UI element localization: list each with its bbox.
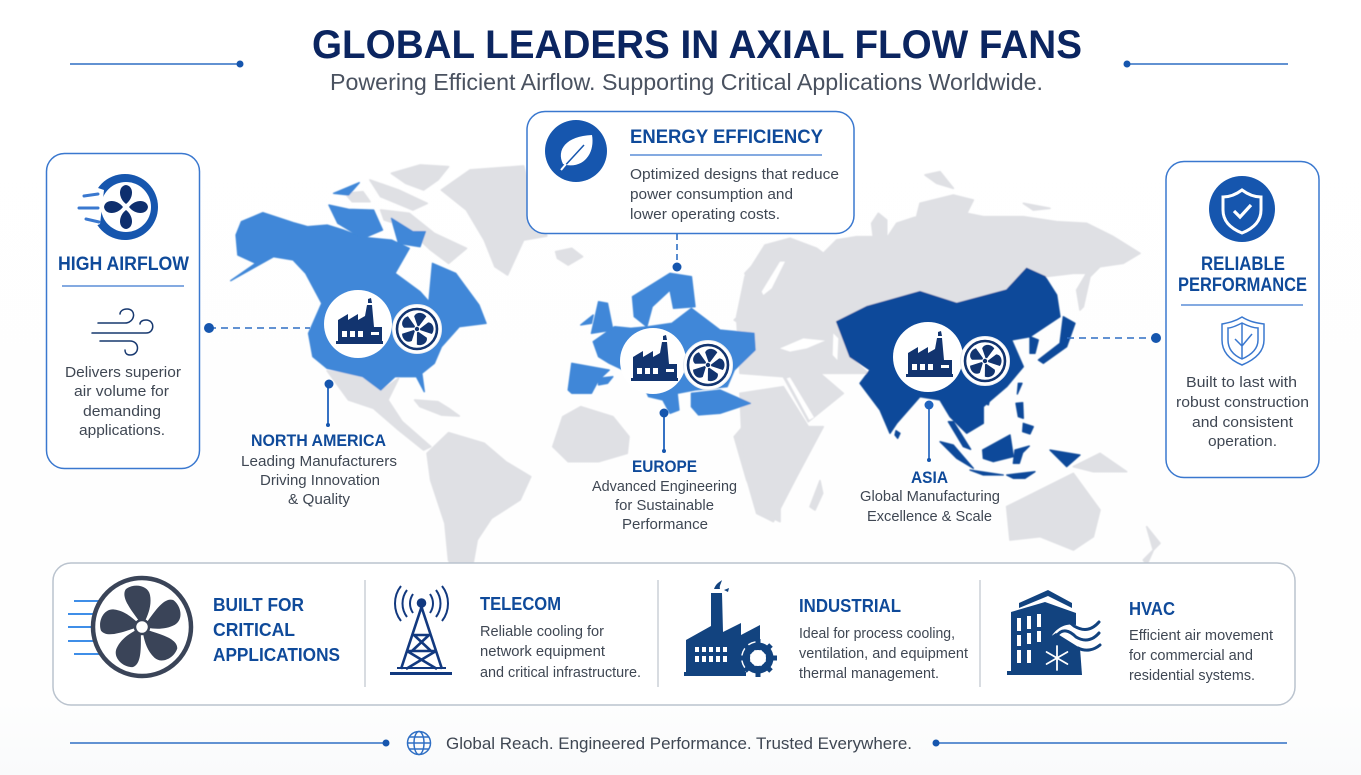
badge: North America bbox=[324, 290, 442, 358]
map: North America highlight bbox=[231, 183, 486, 392]
application: industrial: ventilation, and equipment bbox=[799, 646, 968, 662]
panel: energy efficiency bbox=[527, 112, 854, 234]
application: HVAC: Efficient air movement bbox=[1129, 628, 1273, 644]
heading: ENERGY EFFICIENCY bbox=[630, 127, 823, 148]
map: grey Eurasia, Africa and Oceania bbox=[737, 172, 1160, 565]
text block: lower operating costs. bbox=[630, 206, 780, 223]
application: HVAC: residential systems. bbox=[1129, 668, 1255, 684]
badge: Asia bbox=[893, 322, 1010, 392]
text block: air volume for bbox=[74, 383, 169, 400]
application: telecom: and critical infrastructure. bbox=[480, 665, 641, 681]
text block: applications. bbox=[79, 422, 165, 439]
label: North America: NORTH AMERICA bbox=[251, 432, 386, 450]
heading bbox=[1178, 254, 1307, 296]
application: HVAC bbox=[1129, 599, 1273, 684]
label: Europe: Advanced Engineering bbox=[592, 478, 737, 495]
connector: high airflow to North America bbox=[204, 323, 310, 333]
text block bbox=[65, 364, 181, 439]
text block: Optimized designs that reduce bbox=[630, 166, 839, 183]
text block: power consumption and bbox=[630, 186, 793, 203]
icon: airflow fan bbox=[79, 174, 158, 240]
map: Europe highlight bbox=[568, 273, 755, 415]
text block bbox=[630, 166, 839, 223]
connector: energy efficiency to Europe bbox=[672, 234, 682, 272]
badge: Europe bbox=[620, 328, 732, 394]
footer tagline: Global Reach. Engineered Performance. Trusted Everywhere. bbox=[446, 734, 912, 753]
application: telecom: network equipment bbox=[480, 644, 605, 660]
text block bbox=[1176, 374, 1309, 450]
application: HVAC: HVAC bbox=[1129, 599, 1175, 619]
label: Europe: Performance bbox=[622, 516, 708, 533]
label: North America: Driving Innovation bbox=[260, 472, 380, 489]
footer rule left bbox=[70, 740, 390, 746]
label: Europe: for Sustainable bbox=[615, 497, 714, 514]
application: telecom: TELECOM bbox=[480, 594, 561, 614]
header rule right bbox=[1124, 60, 1288, 68]
label: Asia: ASIA bbox=[911, 469, 948, 487]
application: HVAC: for commercial and bbox=[1129, 648, 1253, 664]
panel: reliable performance bbox=[1166, 162, 1319, 478]
text block: demanding bbox=[83, 403, 161, 420]
icon: wind bbox=[92, 309, 153, 355]
map: seas cut out of Eurasia bbox=[762, 262, 838, 420]
heading: built for critical applications bbox=[213, 595, 340, 665]
label: North America: Leading Manufacturers bbox=[241, 453, 397, 470]
panel: high airflow bbox=[46, 154, 200, 468]
map: Asia highlight bbox=[837, 268, 1080, 478]
heading: built for critical applications: CRITICAL bbox=[213, 620, 295, 640]
text block: Built to last with bbox=[1186, 374, 1297, 391]
title: GLOBAL LEADERS IN AXIAL FLOW FANS bbox=[312, 23, 1082, 67]
pointer: Asia bbox=[924, 400, 934, 462]
label: Europe: EUROPE bbox=[632, 458, 697, 476]
header rule left bbox=[70, 60, 244, 68]
text block: operation. bbox=[1208, 433, 1277, 450]
icon: globe bbox=[408, 732, 430, 754]
heading: HIGH AIRFLOW bbox=[58, 254, 189, 275]
label: Asia bbox=[860, 469, 1000, 525]
application: telecom: Reliable cooling for bbox=[480, 624, 604, 640]
label: Asia: Global Manufacturing bbox=[860, 488, 1000, 505]
icon: shield check bbox=[1209, 176, 1275, 242]
heading: built for critical applications: APPLICATIONS bbox=[213, 645, 340, 665]
heading: PERFORMANCE bbox=[1178, 275, 1307, 296]
map: grey west landmasses bbox=[327, 165, 780, 590]
panel: applications bbox=[53, 563, 1295, 705]
world map bbox=[231, 165, 1160, 590]
footer rule right bbox=[932, 740, 1287, 746]
connector: reliable performance to Asia bbox=[1067, 333, 1161, 343]
heading: RELIABLE bbox=[1201, 254, 1285, 275]
text block: and consistent bbox=[1192, 414, 1294, 431]
heading: built for critical applications: BUILT FOR bbox=[213, 595, 304, 615]
label: North America: & Quality bbox=[288, 491, 351, 508]
icon: large fan bbox=[68, 578, 191, 676]
pointer: North America bbox=[324, 380, 334, 427]
label: Asia: Excellence & Scale bbox=[867, 508, 992, 525]
application: telecom bbox=[480, 594, 641, 681]
text block: robust construction bbox=[1176, 394, 1309, 411]
pointer: Europe bbox=[660, 408, 668, 453]
icon: outline shield bbox=[1222, 317, 1264, 365]
application: industrial: thermal management. bbox=[799, 666, 939, 682]
icon: factory with gear bbox=[684, 580, 777, 677]
text block: Delivers superior bbox=[65, 364, 181, 381]
label: North America bbox=[241, 432, 397, 508]
application: industrial bbox=[799, 596, 968, 682]
label: Europe bbox=[592, 458, 737, 533]
icon: telecom tower bbox=[390, 586, 452, 674]
icon: HVAC building bbox=[1007, 590, 1100, 675]
application: industrial: INDUSTRIAL bbox=[799, 596, 901, 616]
subtitle: Powering Efficient Airflow. Supporting Critical Applications Worldwide. bbox=[330, 69, 1043, 95]
application: industrial: Ideal for process cooling, bbox=[799, 626, 955, 642]
icon: leaf bbox=[545, 120, 607, 182]
